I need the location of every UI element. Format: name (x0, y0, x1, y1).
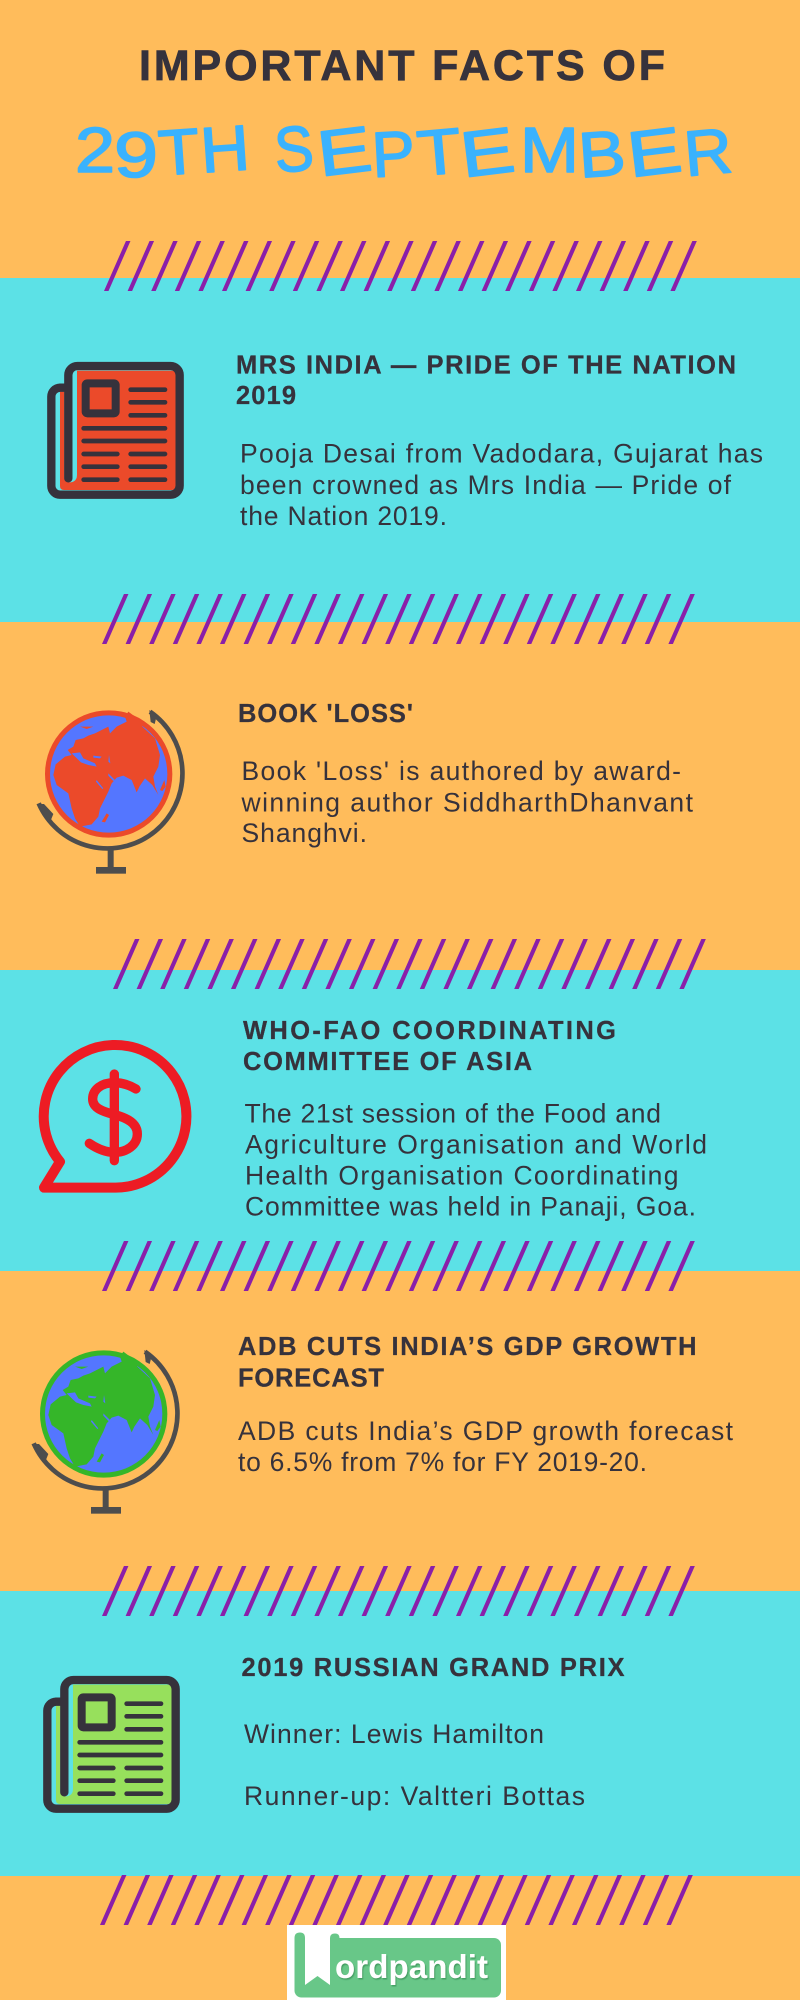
text: WHO-FAO body: The 21st session of the Food and (244, 1098, 661, 1128)
date heading: M (520, 114, 579, 186)
text: Mrs India body: Pooja Desai from Vadodara, Gujarat has (240, 438, 763, 468)
text: Mrs India body (240, 438, 763, 531)
date heading: T (156, 115, 202, 189)
date heading: E (313, 112, 376, 190)
heading: ADB: FORECAST (238, 1364, 384, 1392)
date heading: E (623, 113, 686, 191)
heading: Mrs India: 2019 (236, 382, 296, 410)
text: Russian Grand Prix winner: Winner: Lewis Hamilton (244, 1719, 544, 1749)
date heading: E (456, 113, 519, 191)
heading: ADB: ADB CUTS INDIA’S GDP GROWTH (238, 1333, 696, 1361)
text: ADB body: ADB cuts India’s GDP growth forecast (238, 1416, 734, 1446)
hatch divider 4 (113, 1241, 684, 1291)
date heading: B (576, 116, 628, 192)
text: Book Loss body: Shanghvi. (242, 818, 367, 848)
date heading: H (198, 111, 252, 187)
heading: Book Loss: BOOK 'LOSS' (238, 700, 413, 728)
icon: red globe (37, 710, 182, 874)
text: WHO-FAO body: Committee was held in Panaji, Goa. (245, 1192, 696, 1222)
text: Mrs India body: the Nation 2019. (240, 501, 447, 531)
date heading: 2 (75, 114, 115, 186)
text: Russian Grand Prix runner-up: Runner-up: Valtteri Bottas (244, 1781, 585, 1811)
hatch divider 3 (124, 939, 695, 989)
icon: dollar speech bubble (44, 1045, 186, 1188)
panel: Book Loss background (0, 622, 800, 970)
panel: WHO-FAO background (0, 970, 800, 1271)
panel: footer background (0, 1876, 800, 2000)
text: WHO-FAO body: Agriculture Organisation and World (245, 1130, 707, 1160)
date heading: 9 (114, 119, 158, 191)
date heading (75, 111, 735, 192)
hatch divider 5 (113, 1566, 684, 1616)
hatch divider 2 (113, 594, 684, 644)
text: Book Loss body: winning author SiddharthDhanvant (240, 788, 694, 818)
date heading: T (414, 114, 464, 190)
logo: Wordpandit (287, 1925, 506, 2000)
icon: red newspaper (51, 366, 180, 495)
heading: WHO-FAO: COMMITTEE OF ASIA (243, 1048, 532, 1076)
text: Book Loss body: Book 'Loss' is authored by award- (242, 756, 681, 786)
panel: header background (0, 0, 800, 278)
text: WHO-FAO body: Health Organisation Coordinating (245, 1160, 678, 1190)
logo: Wordpandit: ordpandit (335, 1948, 488, 1985)
heading: Mrs India: MRS INDIA — PRIDE OF THE NATION (236, 352, 736, 380)
icon: green globe (32, 1350, 177, 1514)
text: Mrs India body: been crowned as Mrs India — Pride of (240, 470, 732, 500)
text: ADB body: to 6.5% from 7% for FY 2019-20. (238, 1447, 647, 1477)
date heading: S (272, 112, 316, 186)
heading: Russian Grand Prix: 2019 RUSSIAN GRAND PRIX (242, 1654, 624, 1682)
text: Book Loss body (240, 756, 694, 848)
icon: green newspaper (47, 1680, 176, 1809)
heading: WHO-FAO: WHO-FAO COORDINATING (243, 1017, 616, 1045)
text: WHO-FAO body (244, 1098, 707, 1222)
panel: ADB background (0, 1271, 800, 1591)
heading: Mrs India (236, 352, 736, 410)
hatch divider 6 (111, 1875, 682, 1925)
title: IMPORTANT FACTS OF (139, 42, 665, 90)
panel: Mrs India background (0, 278, 800, 622)
hatch divider 1 (115, 241, 686, 291)
date heading: P (370, 117, 417, 191)
text: ADB body (238, 1416, 734, 1477)
heading: WHO-FAO (243, 1017, 616, 1076)
date heading: R (681, 114, 735, 190)
panel: Russian Grand Prix background (0, 1591, 800, 1876)
heading: ADB (238, 1333, 696, 1392)
